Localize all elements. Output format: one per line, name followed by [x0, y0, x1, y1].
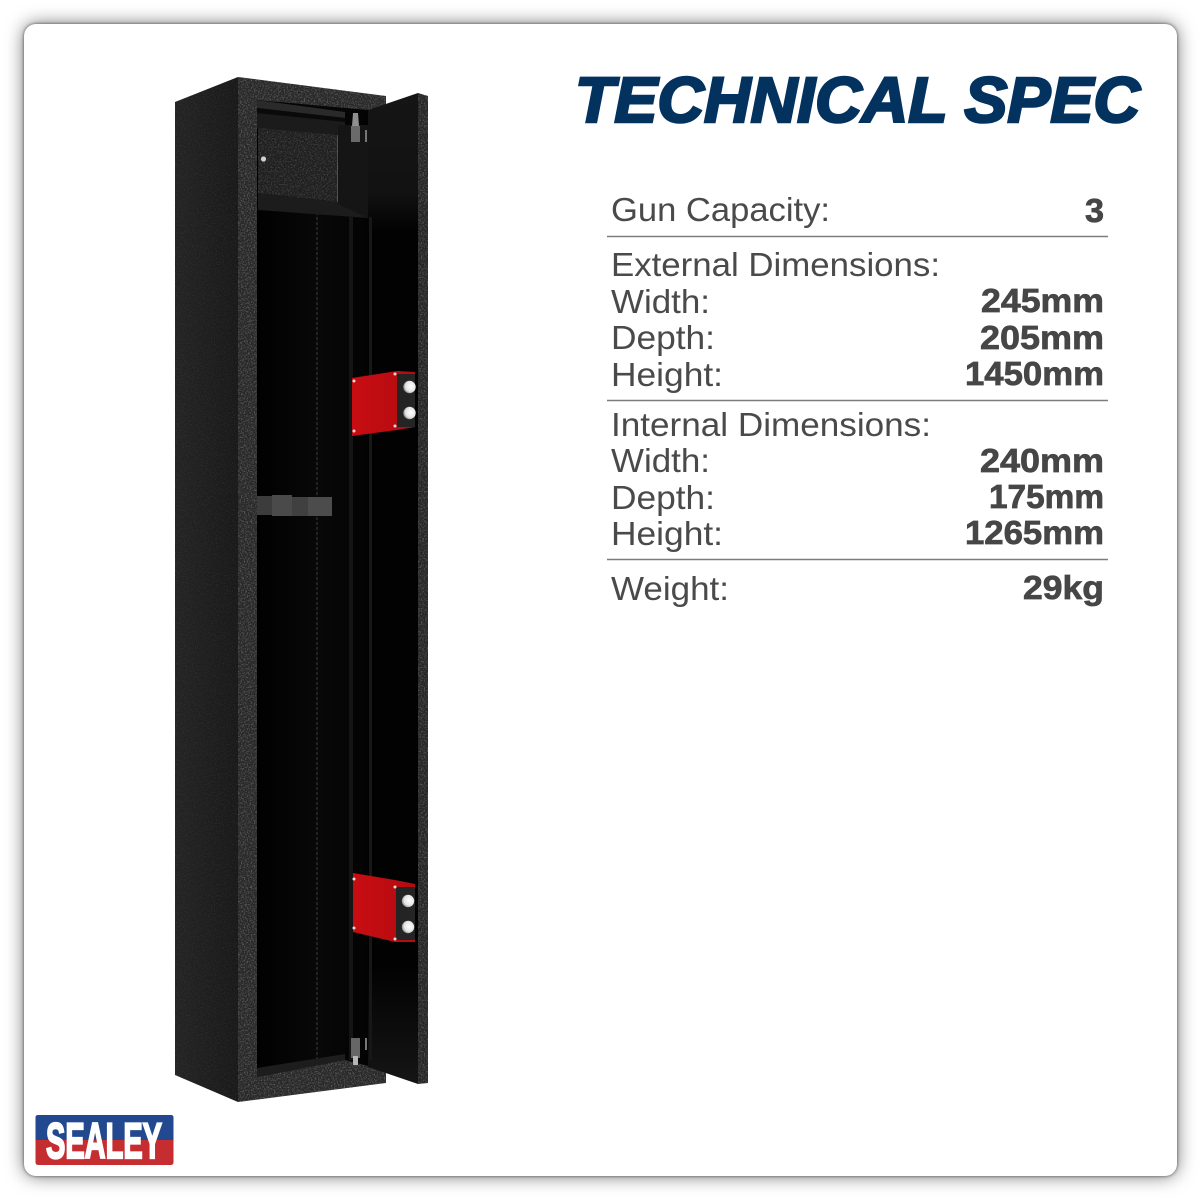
heading: external dimensions: External Dimensions:: [611, 246, 940, 283]
row: external height: [611, 355, 1104, 393]
row: weight: 29kg: [1023, 569, 1104, 606]
row: external width: [611, 282, 1104, 320]
upper lock box: [352, 371, 416, 436]
row: internal width: [611, 442, 1104, 479]
top compartment: [258, 125, 368, 218]
row: internal height: [611, 514, 1104, 552]
row: internal depth: 175mm: [989, 478, 1104, 515]
bottom hinge: [351, 1038, 367, 1065]
row: weight: [611, 569, 1104, 607]
row: external depth: 205mm: [980, 319, 1104, 356]
row: gun capacity: [611, 191, 1104, 229]
row: external width: Width:: [611, 283, 710, 320]
cabinet interior: [257, 100, 368, 1077]
row: external depth: Depth:: [611, 319, 715, 356]
top hinge: [351, 113, 367, 142]
cabinet front frame: [238, 77, 386, 1102]
row: weight: Weight:: [611, 570, 729, 607]
row: gun capacity: 3: [1085, 192, 1104, 229]
rail strips: [349, 217, 372, 1060]
row: internal width: Width:: [611, 442, 710, 479]
row: internal width: 240mm: [980, 442, 1104, 479]
row: external height: Height:: [611, 356, 723, 393]
gun rack: [257, 495, 332, 516]
title: TECHNICAL SPEC: [575, 64, 1141, 136]
lower lock box: [352, 873, 415, 942]
logo: Sealey: [36, 1113, 174, 1169]
row: internal depth: [611, 478, 1104, 516]
row: external width: 245mm: [981, 282, 1104, 319]
door: [368, 93, 428, 1084]
row: gun capacity: Gun Capacity:: [611, 191, 830, 228]
spec table: [607, 191, 1108, 607]
row: internal height: Height:: [611, 515, 723, 552]
heading: internal dimensions: Internal Dimensions:: [611, 406, 931, 443]
row: internal height: 1265mm: [965, 514, 1104, 551]
row: internal depth: Depth:: [611, 479, 715, 516]
cabinet side panel: [175, 77, 238, 1102]
row: external depth: [611, 319, 1104, 356]
gun cabinet illustration: [175, 77, 428, 1102]
row: external height: 1450mm: [965, 355, 1104, 392]
logo: Sealey: SEALEY: [46, 1113, 162, 1169]
